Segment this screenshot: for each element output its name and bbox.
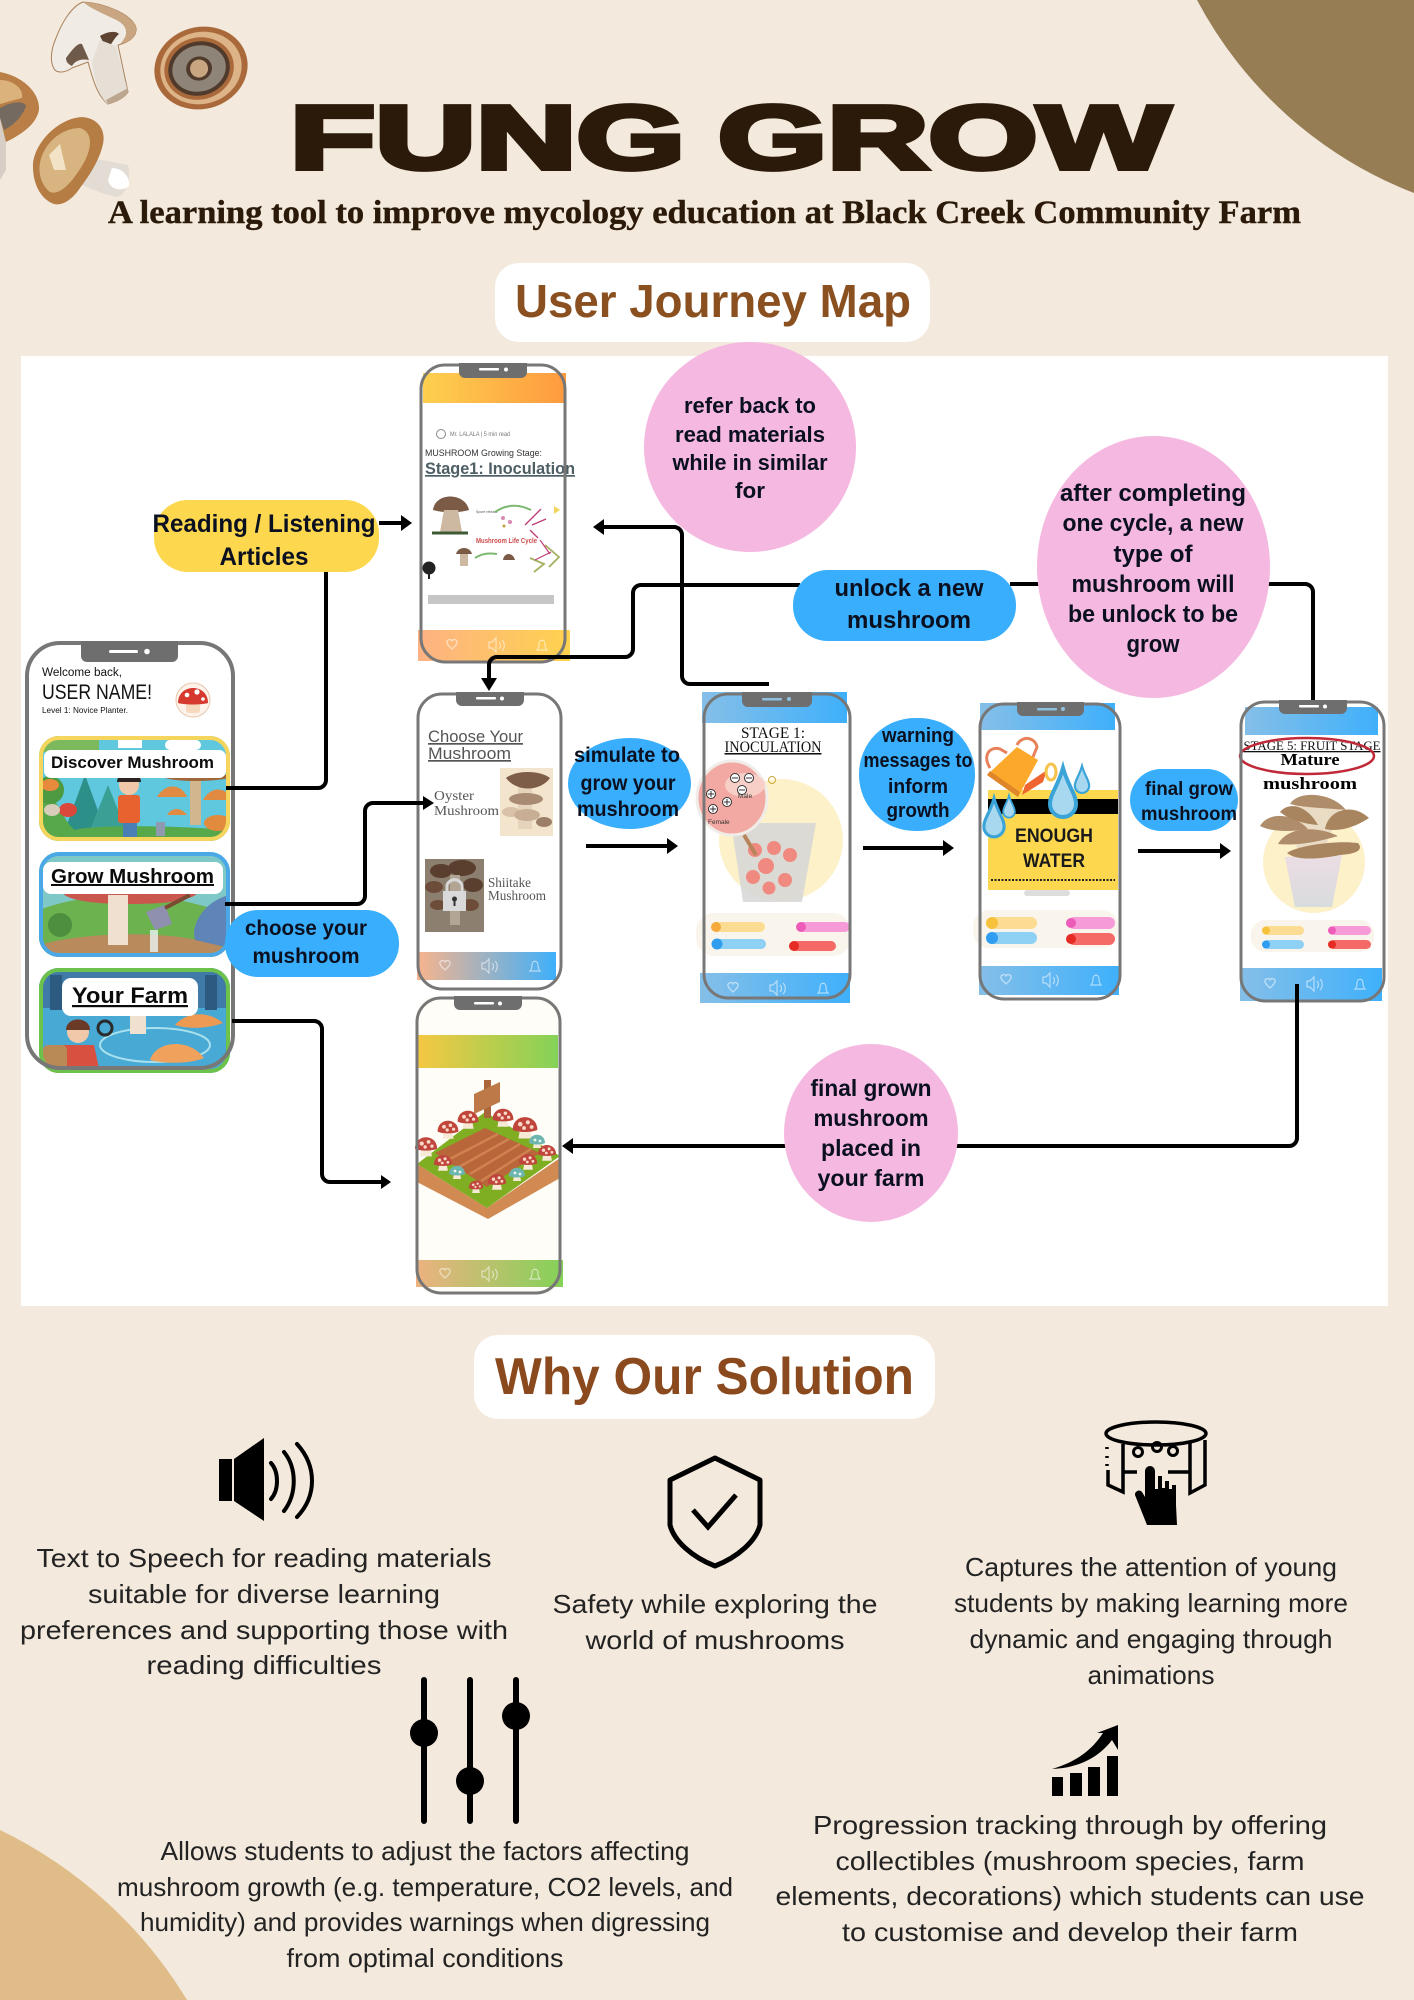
- icon: progress chart: [1052, 1725, 1118, 1796]
- callout: after completing one cycle: one cycle, a new: [1062, 510, 1244, 537]
- phone frame: [27, 641, 233, 1068]
- card: grow mushroom: [39, 852, 230, 957]
- callout: refer back: refer back to: [684, 393, 816, 418]
- nav bar: [979, 966, 1119, 995]
- card: your farm: Your Farm: [72, 983, 188, 1008]
- phone: mature mushroom screen: STAGE 5: FRUIT STAGE: [1244, 738, 1381, 753]
- phone: home screen: [25, 641, 235, 1073]
- callout: after completing one cycle: grow: [1126, 631, 1180, 658]
- phone: stage 1 inoculation screen: INOCULATION: [724, 739, 822, 756]
- greeting text: [42, 667, 152, 715]
- callout: after completing one cycle: [1037, 436, 1270, 698]
- callout: final grown mushroom: final grown: [810, 1075, 932, 1101]
- pill: reading and listening articles: Articles: [220, 543, 308, 571]
- card: grow mushroom: Grow Mushroom: [51, 866, 214, 888]
- arrow: stage screen back to article: [593, 519, 769, 684]
- pill: simulate to grow: simulate to: [574, 744, 680, 767]
- text: adjust factors: from optimal conditions: [286, 1943, 564, 1973]
- callout: refer back: while in similar: [672, 450, 828, 475]
- card: discover mushroom: [36, 736, 233, 841]
- arrow: simulate to stage screen: [586, 838, 678, 854]
- text: progression tracking: Progression tracking through by offering: [813, 1810, 1327, 1840]
- phone: choose your mushroom screen: Oyster: [434, 789, 474, 804]
- callout: final grown mushroom: placed in: [821, 1135, 921, 1161]
- title: [290, 88, 1170, 188]
- pill: choose your mushroom: [225, 910, 399, 977]
- phone: choose your mushroom screen: Mushroom: [488, 889, 546, 904]
- illustration: inoculation cup: Male: [738, 793, 752, 800]
- nav bar: [417, 952, 556, 980]
- callout: after completing one cycle: be unlock to be: [1068, 601, 1238, 628]
- text: captures attention: students by making learning more: [954, 1588, 1348, 1618]
- connector: after cycle to mature phone: [1268, 584, 1313, 700]
- phone: enough water screen: [973, 702, 1122, 1001]
- text: progression tracking: [776, 1810, 1364, 1947]
- pill: final grow mushroom: [1130, 769, 1238, 831]
- illustration: inoculation cup: Female: [708, 819, 730, 826]
- greeting text: Welcome back,: [42, 667, 122, 679]
- phone: stage 1 inoculation screen: [696, 692, 852, 1003]
- phone: stage 1 inoculation screen: STAGE 1:: [741, 725, 805, 742]
- text: adjust factors: Allows students to adjust the factors affecting: [160, 1836, 690, 1866]
- heading: user journey map: User Journey Map: [515, 275, 911, 327]
- text: safety: Safety while exploring the: [552, 1589, 878, 1619]
- text: text to speech: preferences and supporting those with: [20, 1615, 508, 1645]
- warning box: WATER: [1023, 851, 1085, 872]
- mushroom: tan cap with stem: [33, 117, 129, 204]
- heading: user journey map: [495, 263, 930, 342]
- callout: after completing one cycle: mushroom will: [1072, 571, 1234, 598]
- slider panel: [696, 913, 851, 956]
- pill: final grow mushroom: final grow: [1145, 779, 1233, 800]
- phone: mature mushroom screen: Mature: [1280, 750, 1340, 769]
- card: your farm: [39, 968, 230, 1073]
- callout: after completing one cycle: type of: [1114, 541, 1194, 568]
- warning box: [988, 790, 1118, 896]
- text: safety: [552, 1589, 878, 1655]
- phone: mature mushroom screen: mushroom: [1263, 774, 1357, 793]
- pill: final grow mushroom: mushroom: [1141, 804, 1237, 825]
- callout: refer back: read materials: [675, 422, 825, 447]
- text: text to speech: [20, 1543, 508, 1680]
- text: text to speech: reading difficulties: [146, 1650, 382, 1680]
- nav bar: [418, 630, 570, 661]
- illustration: inoculation cup: [697, 761, 843, 902]
- illustration: mature mushroom in cup: [1260, 795, 1369, 913]
- avatar: mushroom: [176, 683, 210, 717]
- pill: simulate to grow: [568, 738, 691, 829]
- text: adjust factors: [117, 1836, 733, 1973]
- heading: why our solution: [474, 1335, 935, 1419]
- pill: reading and listening articles: Reading / Listening: [152, 510, 376, 538]
- phone: choose your mushroom screen: Choose Your: [428, 727, 523, 746]
- text: captures attention: Captures the attention of young: [965, 1552, 1337, 1582]
- icon: watering can and drops: [984, 738, 1089, 837]
- panel: user journey map: [21, 342, 1388, 1306]
- text: progression tracking: elements, decorations) which students can use: [776, 1881, 1364, 1911]
- connector: your farm to farm screen: [232, 1021, 391, 1189]
- title: GROW: [718, 88, 1170, 188]
- diagram: mushroom life cycle: Spore release: [476, 510, 498, 514]
- subtitle: A learning tool to improve mycology education at Black Creek Community Farm: [108, 195, 1301, 231]
- diagram: mushroom life cycle: Mushroom Life Cycle: [476, 536, 537, 545]
- arrow: warning to water screen: [863, 840, 954, 856]
- pill: choose your mushroom: mushroom: [252, 945, 360, 968]
- text: adjust factors: mushroom growth (e.g. temperature, CO2 levels, and: [117, 1872, 733, 1902]
- icon: adjustment sliders: [410, 1680, 530, 1821]
- nav bar: [700, 973, 850, 1003]
- pill: unlock a new mushroom: mushroom: [847, 607, 971, 634]
- phone: mature mushroom screen: [1239, 700, 1386, 1003]
- arrow: mature phone to farm screen: [562, 984, 1297, 1154]
- connector: grow to choose screen: [225, 796, 434, 904]
- connector: discover to reading pill: [226, 572, 326, 788]
- title: FUNG: [290, 88, 685, 188]
- mushroom illustrations: [0, 2, 257, 204]
- text: safety: world of mushrooms: [584, 1625, 844, 1655]
- phone: article screen: [418, 363, 575, 664]
- phone: choose your mushroom screen: Shiitake: [488, 876, 531, 891]
- callout: final grown mushroom: mushroom: [814, 1105, 928, 1131]
- pill: simulate to grow: mushroom: [577, 798, 679, 821]
- connector: unlock pill to after cycle callout: [1010, 582, 1050, 586]
- nav bar: [1240, 968, 1382, 1001]
- text: progression tracking: collectibles (mushroom species, farm: [836, 1846, 1304, 1876]
- mushroom: white cap side view: [51, 2, 136, 104]
- phone: article screen: Stage1: Inoculation: [425, 459, 575, 478]
- greeting text: USER NAME!: [42, 681, 152, 704]
- callout: refer back: [644, 342, 856, 552]
- phone: your farm screen: [415, 996, 563, 1295]
- pill: reading and listening articles: [152, 500, 379, 572]
- image: oyster mushrooms: [500, 768, 553, 836]
- phone: choose your mushroom screen: Mushroom: [428, 744, 511, 763]
- callout: final grown mushroom: your farm: [818, 1165, 924, 1191]
- pill: unlock a new mushroom: [793, 570, 1016, 641]
- text: text to speech: Text to Speech for reading materials: [36, 1543, 492, 1573]
- phone: article screen: MUSHROOM Growing Stage:: [425, 448, 542, 459]
- illustration: isometric mushroom farm: [415, 1080, 560, 1219]
- text: captures attention: [954, 1552, 1348, 1690]
- card: discover mushroom: Discover Mushroom: [51, 753, 214, 772]
- greeting text: Level 1: Novice Planter.: [42, 705, 128, 715]
- pill: warning messages: [859, 718, 975, 831]
- icon: speaker: [219, 1438, 312, 1521]
- pill: warning messages: warning: [881, 725, 954, 747]
- nav bar: [416, 1260, 563, 1287]
- pill: warning messages: growth: [886, 800, 950, 822]
- decorative brown corner shape: [1197, 0, 1414, 193]
- phone: choose your mushroom screen: Mushroom: [434, 804, 499, 819]
- decorative tan corner shape: [0, 1830, 187, 2000]
- pill: warning messages: messages to: [864, 750, 972, 772]
- mushroom: left edge partial: [0, 72, 39, 180]
- text: captures attention: animations: [1088, 1660, 1214, 1690]
- text: progression tracking: to customise and develop their farm: [842, 1917, 1298, 1947]
- callout: final grown mushroom: [784, 1044, 958, 1222]
- mushroom: underside view: [145, 16, 257, 120]
- diagram: mushroom life cycle: [422, 496, 560, 579]
- pill: simulate to grow: grow your: [580, 772, 676, 795]
- image: locked shiitake mushrooms: [425, 859, 484, 932]
- phone: article screen: Mr. LALALA | 5 min read: [450, 431, 510, 438]
- warning box: ENOUGH: [1015, 826, 1093, 847]
- slider panel: [973, 910, 1118, 948]
- phone: choose your mushroom screen: [416, 692, 563, 991]
- arrow: final grow to mature screen: [1138, 843, 1231, 859]
- text: captures attention: dynamic and engaging through: [970, 1624, 1332, 1654]
- icon: animation touch cylinder: [1106, 1422, 1206, 1525]
- heading: why our solution: Why Our Solution: [495, 1348, 914, 1406]
- arrow: reading pill to article screen: [379, 515, 412, 531]
- pill: unlock a new mushroom: unlock a new: [834, 575, 984, 602]
- callout: after completing one cycle: after completing: [1060, 480, 1246, 507]
- icon: shield with check: [670, 1458, 760, 1566]
- pill: warning messages: inform: [888, 776, 948, 798]
- text: adjust factors: humidity) and provides warnings when digressing: [140, 1907, 710, 1937]
- arrow: unlock new mushroom back to choose screen: [481, 585, 800, 691]
- slider panel: [1251, 920, 1374, 952]
- callout: refer back: for: [735, 478, 765, 503]
- text: text to speech: suitable for diverse learning: [88, 1579, 440, 1609]
- pill: choose your mushroom: choose your: [245, 917, 367, 940]
